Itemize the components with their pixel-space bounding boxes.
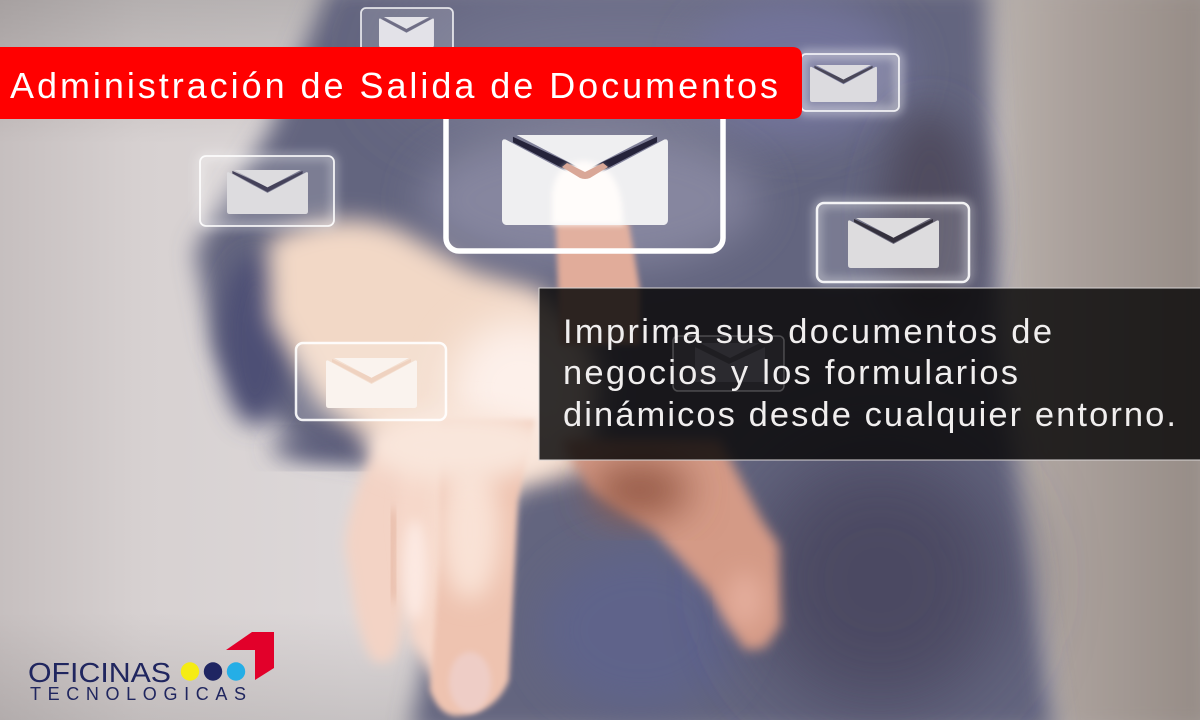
icon: left envelope <box>200 156 334 226</box>
fingertip through flap gap <box>562 163 608 179</box>
description text: dinámicos desde cualquier entorno. <box>563 396 1176 434</box>
icon: upper right envelope <box>801 54 899 111</box>
palm <box>268 220 590 490</box>
little finger <box>345 430 430 663</box>
description text: Imprima sus documentos de <box>563 313 1052 351</box>
nail <box>449 652 491 712</box>
icon: top envelope <box>361 8 453 68</box>
icon: main envelope in large frame <box>446 90 723 251</box>
logo dots <box>181 662 245 681</box>
description text: negocios y los formularios <box>563 354 1018 392</box>
middle finger <box>397 430 470 690</box>
fingertip seen through envelope <box>552 161 624 225</box>
logo wordmark bottom: TECNOLOGICAS <box>30 684 246 704</box>
logo: Oficinas Tecnologicas <box>28 632 274 704</box>
logo wordmark top: OFICINAS <box>28 657 171 688</box>
icon: lower left envelope <box>296 343 446 420</box>
torso <box>195 0 1055 720</box>
thumb <box>560 440 781 650</box>
description text <box>563 313 1176 434</box>
description panel <box>539 288 1200 460</box>
front finger <box>430 420 535 716</box>
logo arrow <box>226 632 274 680</box>
title banner <box>0 47 802 119</box>
icon: right envelope <box>817 203 969 282</box>
title: Administración de Salida de Documentos <box>10 65 778 106</box>
pointing finger <box>555 200 640 345</box>
icon: dim envelope behind panel <box>673 336 784 391</box>
